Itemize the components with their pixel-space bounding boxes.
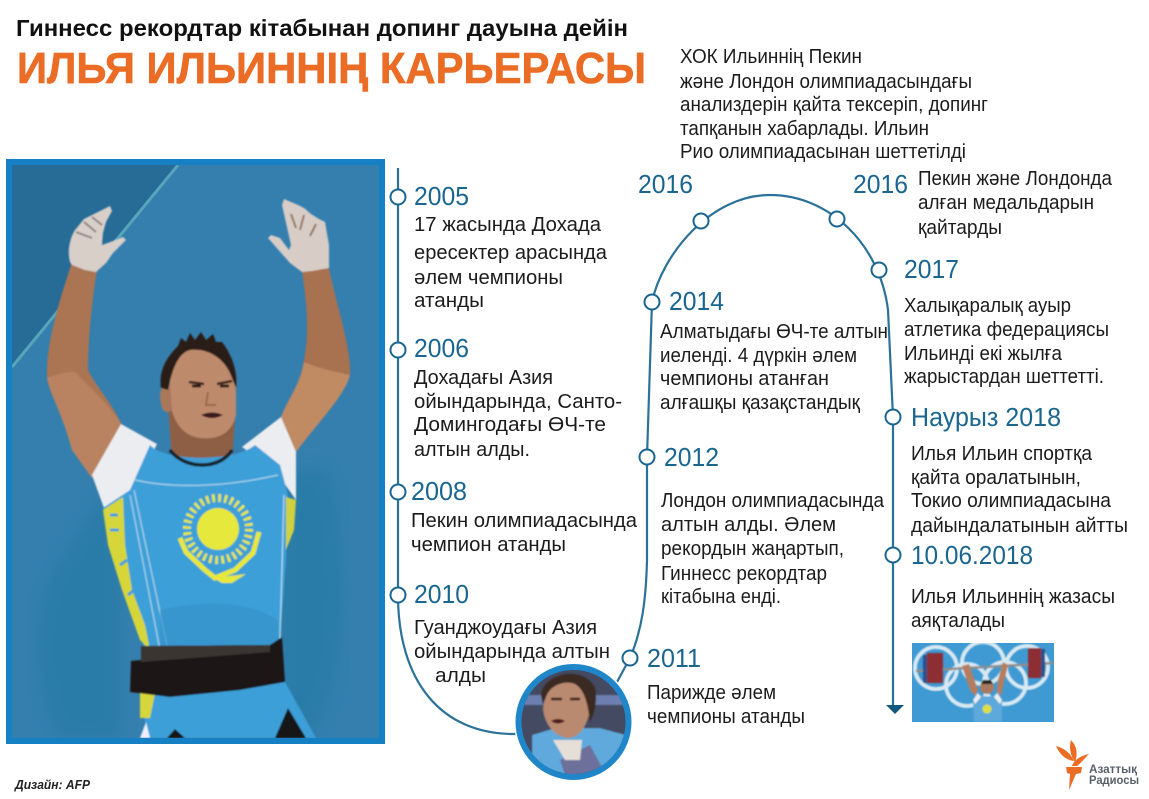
logo: Azattyq Radiosy: Азаттық — [1089, 762, 1137, 776]
intro text block — [680, 46, 988, 163]
event 2017: атлетика федерациясы — [904, 319, 1109, 341]
event 2014: иеленді. 4 дүркін әлем — [660, 345, 857, 367]
logo: Azattyq Radiosy: Радиосы — [1089, 773, 1139, 787]
event 2008: чемпион атанды — [411, 534, 566, 556]
left arm — [46, 264, 122, 424]
intro text block: ХОК Ильиннің Пекин — [680, 46, 862, 68]
neck and shoulders — [168, 405, 236, 460]
event 2006: 2006 — [414, 335, 469, 363]
event 2012: алтын алды. Әлем — [661, 514, 836, 536]
sun emblem — [180, 498, 259, 583]
subtitle heading: Гиннесс рекордтар кітабынан допинг дауына дейін — [16, 15, 628, 41]
left hand — [69, 206, 126, 272]
event 2017: Халықаралық ауыр — [904, 295, 1071, 317]
event March 2018: Илья Ильин спортқа — [911, 443, 1093, 465]
event 2008: Пекин олимпиадасында — [411, 510, 638, 532]
eyes, nose and mouth — [189, 381, 232, 384]
event 2010: Гуанджоудағы Азия — [414, 617, 597, 639]
event March 2018: Наурыз 2018 — [911, 404, 1061, 432]
event second 2016 — [853, 168, 1113, 239]
event 2017: Ильинді екі жылға — [904, 343, 1063, 365]
timeline nodes — [390, 190, 900, 666]
event 2010 — [414, 581, 610, 687]
event 2017: 2017 — [904, 256, 959, 284]
event 2008 — [411, 478, 638, 556]
event March 2018: Токио олимпиадасына — [911, 490, 1112, 512]
head — [170, 345, 236, 438]
event 2006 — [414, 335, 622, 461]
title — [16, 15, 646, 93]
event 2014: чемпионы атанған — [660, 368, 829, 390]
intro text block: және Лондон олимпиадасындағы — [680, 71, 972, 93]
right hand — [268, 199, 329, 272]
event second 2016: қайтарды — [918, 217, 1002, 239]
event 2005: 17 жасында Дохада — [414, 214, 602, 236]
event 2017 — [904, 256, 1109, 388]
event second 2016: 2016 — [853, 171, 908, 199]
round portrait — [514, 662, 633, 782]
event 2011: Парижде әлем — [647, 682, 776, 704]
event 10.06.2018: Илья Ильиннің жазасы — [911, 586, 1115, 608]
event 2012: 2012 — [664, 444, 719, 472]
main heading: ИЛЬЯ ИЛЬИННІҢ КАРЬЕРАСЫ — [17, 45, 646, 93]
small photo: lifting barbell — [912, 642, 1054, 722]
event 10.06.2018: аяқталады — [911, 610, 1005, 632]
event 2006: алтын алды. — [414, 439, 530, 461]
event 2006: ойындарында, Санто- — [414, 391, 622, 413]
event 2008: 2008 — [411, 478, 467, 506]
event 2017: жарыстардан шеттетті. — [904, 366, 1104, 388]
event 2014: алғашқы қазақстандық — [660, 392, 860, 414]
logo: Azattyq Radiosy — [1056, 740, 1139, 790]
event 2005: 2005 — [414, 183, 469, 211]
event 2014: 2014 — [669, 288, 724, 316]
event 2010: алды — [435, 665, 486, 687]
event 2011: чемпионы атанды — [647, 706, 805, 728]
hair — [161, 332, 236, 390]
timeline path — [390, 168, 904, 734]
blue singlet — [103, 445, 316, 738]
event 2012: Гиннесс рекордтар — [661, 563, 827, 585]
event 10.06.2018 — [911, 542, 1115, 632]
shorts — [167, 708, 306, 738]
event 2005 — [414, 183, 608, 312]
intro text block: анализдерін қайта тексеріп, допинг — [680, 94, 988, 116]
event 2011: 2011 — [647, 645, 701, 673]
event 2010: 2010 — [414, 581, 469, 609]
event 2005: ересектер арасында — [414, 242, 608, 264]
photo panel: athlete with raised arms — [6, 159, 385, 744]
event March 2018: қайта оралатынын, — [911, 467, 1081, 489]
event 2012: рекордын жаңартып, — [661, 538, 844, 560]
event 2010: ойындарында алтын — [414, 641, 610, 663]
event 2005: атанды — [414, 290, 484, 312]
event 2006: Домингодағы ӨЧ-те — [414, 414, 606, 436]
intro text block: тапқанын хабарлады. Ильин — [680, 118, 929, 140]
event 10.06.2018: 10.06.2018 — [911, 542, 1033, 570]
event 2005: әлем чемпионы — [414, 267, 563, 289]
event 2012: Лондон олимпиадасында — [661, 490, 885, 512]
intro text block: Рио олимпиадасынан шеттетілді — [680, 141, 966, 163]
white sleeves — [92, 424, 157, 508]
event March 2018: дайындалатынын айтты — [911, 515, 1128, 537]
design credit: Дизайн: AFP — [14, 778, 91, 792]
yellow side ornaments — [103, 497, 150, 650]
event March 2018 — [911, 404, 1128, 537]
icon: torch — [1056, 740, 1089, 790]
event 2011 — [647, 645, 805, 728]
event second 2016: Пекин және Лондонда — [918, 168, 1113, 190]
right arm — [281, 268, 350, 452]
event 2012: кітабына енді. — [661, 586, 781, 608]
arrowhead — [886, 705, 904, 714]
black lifting belt — [130, 637, 285, 697]
event 2014: Алматыдағы ӨЧ-те алтын — [660, 321, 888, 343]
event 2014 — [660, 288, 888, 414]
event second 2016: алған медальдарын — [918, 192, 1094, 214]
event 2012 — [661, 444, 885, 608]
year label: first 2016: 2016 — [638, 171, 693, 199]
event 2006: Дохадағы Азия — [414, 367, 553, 389]
